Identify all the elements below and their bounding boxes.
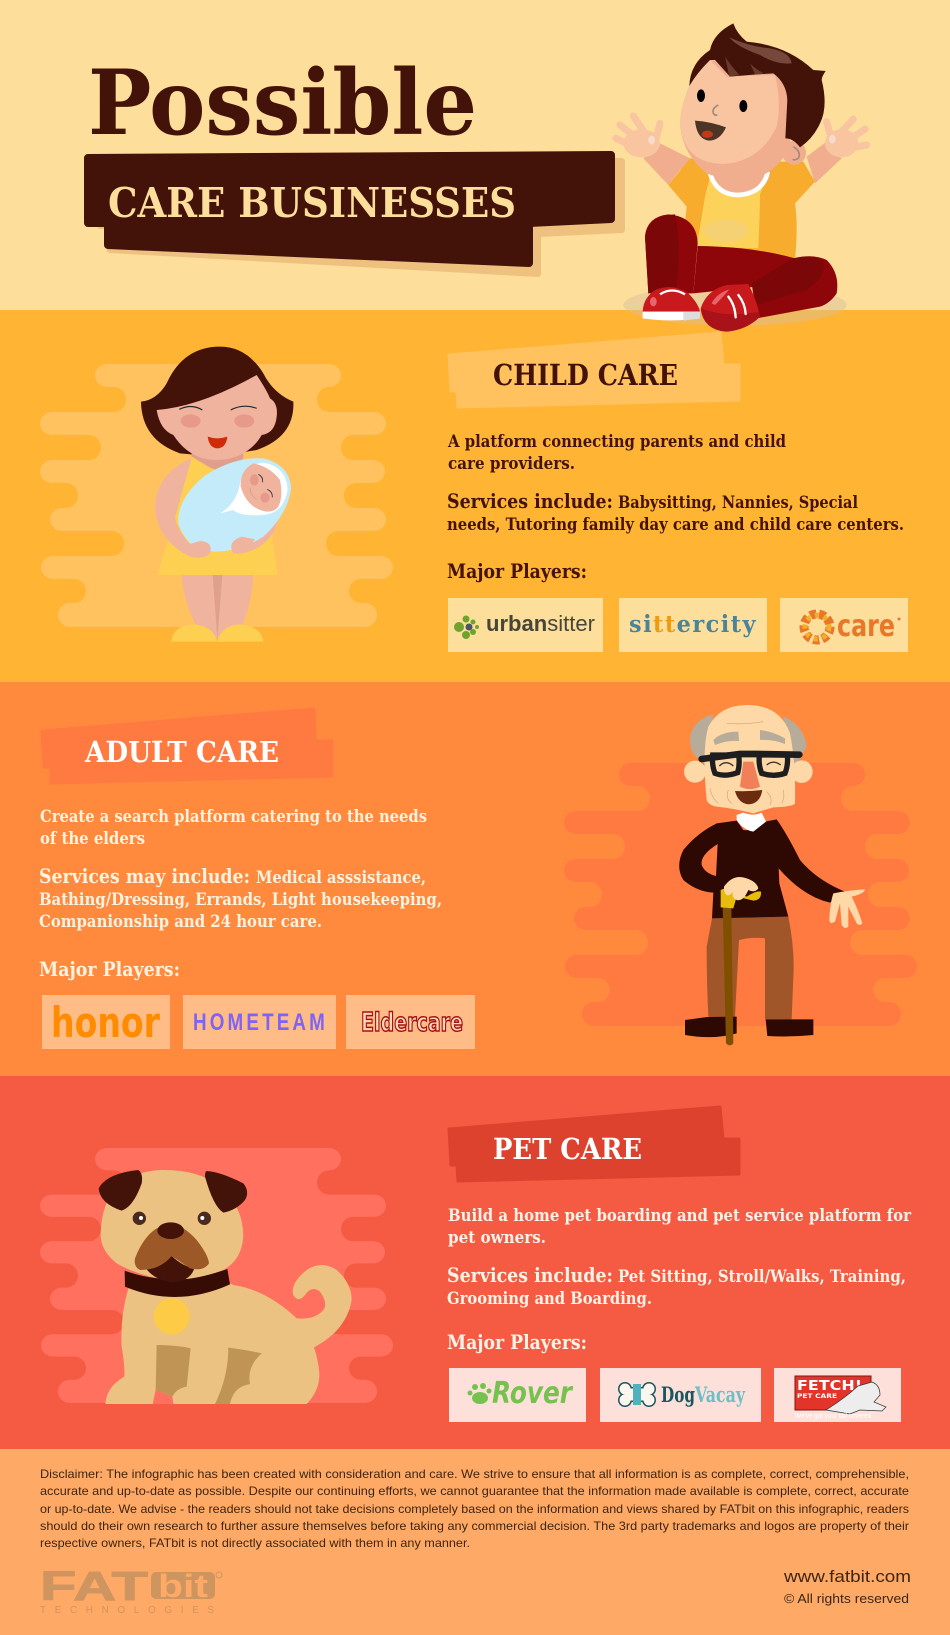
title: Possible: Possible [88,50,477,156]
logo: eldercare [346,995,475,1049]
label: adult care major players: Major Players: [39,957,180,981]
banner: care businesses [88,155,622,274]
panel: adult care [0,682,950,1076]
logo: fetch pet care: FETCH! [797,1379,862,1394]
logo: care [780,598,908,652]
text: child care description [447,432,786,474]
logo: fetch pet care: PET CARE [797,1392,837,1400]
panel: footer [0,1449,950,1635]
text: website: www.fatbit.com [783,1567,911,1586]
illustration: elderly man with cane [679,705,865,1045]
heading tag: pet care [449,1107,739,1181]
logo: rover [449,1368,586,1422]
label: pet care major players: Major Players: [447,1330,587,1354]
text: pet care services: Services include: [447,1263,613,1287]
logo: fetch pet care: We've got your tail covered. [795,1413,873,1420]
text: disclaimer: or up-to-date. We advise - the readers should not take decisions completely based on the information and views shared by FATbit on this infographic, readers [40,1502,909,1516]
logo: honor: honor [51,998,160,1047]
logo: urbansitter: urbansitter [486,611,595,636]
text: adult care services: Bathing/Dressing, Errands, Light housekeeping, [39,890,442,910]
text: pet care description [448,1206,912,1248]
heading tag: pet care: PET CARE [493,1132,642,1166]
text: adult care services: Medical asssistance, [256,868,426,888]
logo: FATbit technologies: FAT [40,1563,148,1609]
text: child care description: A platform connecting parents and child [447,432,786,452]
logo: urbansitter [448,598,603,652]
panel: pet care [0,1076,950,1449]
illustration: pug dog [99,1170,352,1404]
panel: child care [0,310,950,682]
text: pet care description: pet owners. [448,1228,546,1248]
logo: FATbit technologies: bit [158,1568,208,1604]
text: copyright: © All rights reserved [784,1591,909,1606]
text: adult care description: Create a search platform catering to the needs [40,807,427,827]
label: child care major players: Major Players: [447,559,587,583]
heading tag: adult care [42,709,332,783]
illustration: mother holding baby [141,347,293,642]
text: adult care services: Companionship and 24 hour care. [39,912,322,932]
text: child care description: care providers. [448,454,575,474]
logo: dogvacay: Dog [661,1382,695,1407]
illustration: sitting boy [616,23,867,332]
text: disclaimer: accurate and up-to-date as possible. Despite our continuing efforts, we cannot guarantee that the information made available is complete, correct, accurate [40,1484,909,1498]
text: disclaimer: should do their own research to further assure themselves before taking any commercial decision. The 3rd party trademarks and logos are property of their [40,1519,909,1533]
text: adult care description: of the elders [40,829,145,849]
heading tag: child care [449,333,739,407]
logo: eldercare: Eldercare [361,1008,463,1038]
logo: rover: Rover [492,1376,574,1411]
logo: FATbit technologies: TECHNOLOGIES [40,1605,214,1616]
text: disclaimer: respective owners, FATbit is not directly associated with them in any manner. [40,1536,470,1550]
banner: care businesses: CARE BUSINESSES [108,179,516,227]
logo: hometeam: HOMETEAM [193,1009,328,1036]
logo: sittercity: sittercity [629,611,757,638]
logo: sittercity [619,598,767,652]
heading tag: adult care: ADULT CARE [84,735,279,769]
logo: dogvacay [600,1368,761,1422]
text: adult care description [40,807,427,849]
text: child care services: Services include: [447,489,613,513]
text: child care services: Babysitting, Nannies, Special [618,493,858,513]
logo: care: care [837,609,895,644]
logo: hometeam [183,995,336,1049]
text: pet care services: Pet Sitting, Stroll/Walks, Training, [618,1267,906,1287]
text: child care services [447,489,904,535]
panel: header [0,0,950,332]
logo: dogvacay: Vacay [694,1382,746,1407]
text: pet care services: Grooming and Boarding. [447,1289,652,1309]
text: pet care services [447,1263,906,1309]
logo: fetch pet care [774,1368,901,1422]
heading tag: child care: CHILD CARE [493,358,678,392]
logo: FATbit technologies [40,1563,222,1616]
text: disclaimer [40,1467,909,1550]
text: adult care services [39,864,442,932]
text: disclaimer: Disclaimer: The infographic has been created with consideration and care. We strive to ensure that all information is as complete, correct, comprehensible, [40,1467,909,1481]
text: adult care services: Services may include: [39,864,250,888]
